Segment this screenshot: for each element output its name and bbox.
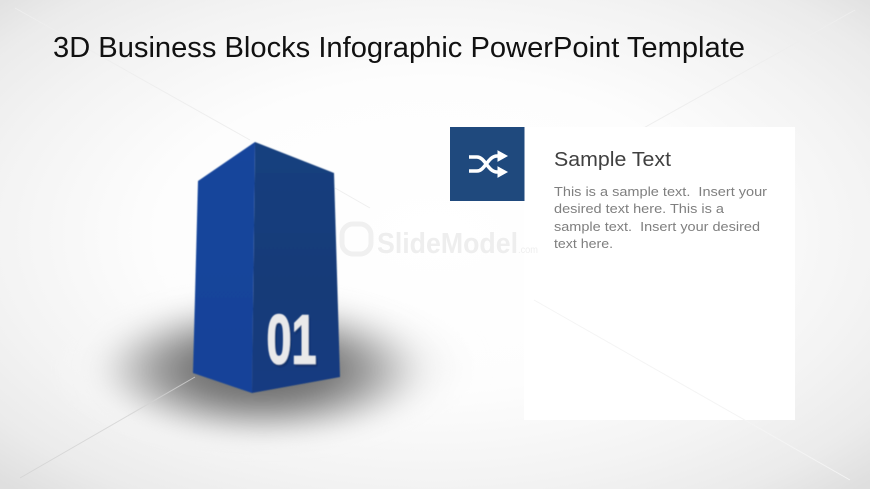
title: 3D Business Blocks Infographic PowerPoint Template	[53, 32, 745, 64]
number 01: 01	[268, 303, 318, 381]
icon tile: shuffle	[450, 127, 524, 201]
outer shadow halo	[55, 288, 475, 448]
panel body text: text here.	[554, 236, 613, 251]
background diagonal streaks	[15, 8, 855, 208]
panel streak	[534, 300, 850, 480]
panel body text	[554, 184, 768, 251]
watermark text: SlideModel	[377, 228, 518, 260]
3D block with number	[193, 142, 340, 393]
block shadow	[90, 300, 434, 440]
panel heading: Sample Text	[554, 148, 671, 171]
panel body text: This is a sample text. Insert your	[554, 184, 768, 199]
watermark domain: .com	[518, 245, 538, 256]
watermark icon	[342, 224, 371, 254]
block right face	[252, 142, 340, 393]
panel body text: desired text here. This is a	[554, 201, 725, 216]
white text panel	[524, 127, 795, 420]
watermark: SlideModel logo	[342, 224, 538, 260]
icon: shuffle arrows	[469, 151, 507, 177]
block faces	[193, 142, 340, 393]
block left face	[193, 142, 255, 393]
panel body text: sample text. Insert your desired	[554, 219, 760, 234]
number 01: 01	[266, 300, 316, 378]
lower-left streak	[20, 377, 195, 478]
number 01	[266, 300, 318, 381]
